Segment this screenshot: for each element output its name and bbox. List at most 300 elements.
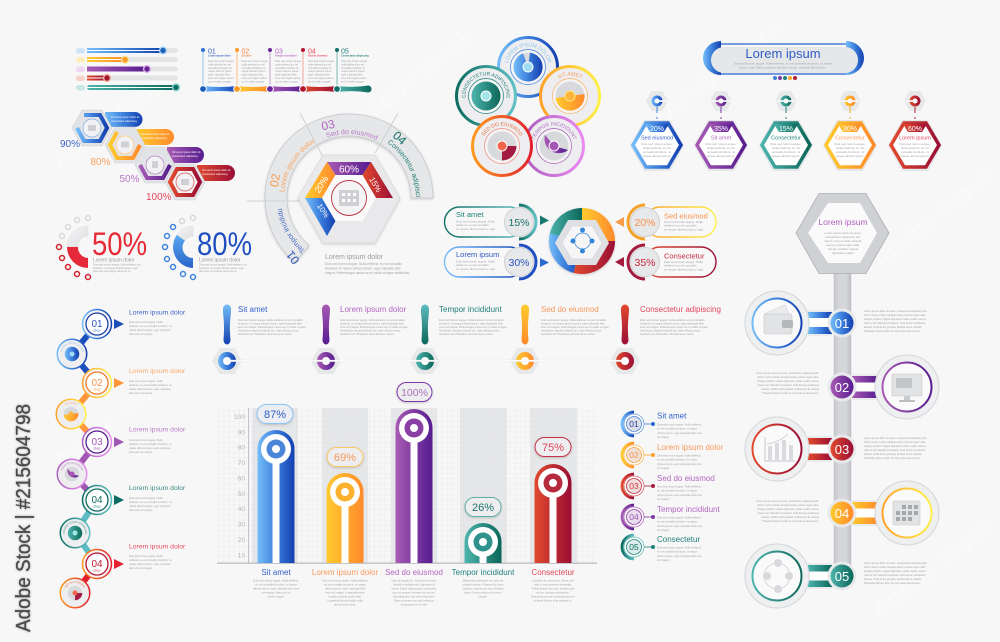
top hexagon bbox=[796, 194, 889, 274]
milestone sit amet: hendrerit vel. Phasellus vehicula lacus metus. bbox=[238, 332, 293, 336]
step 02: neque ultrices ipsum, eget vulputate bbox=[129, 387, 171, 391]
step 03: Lorem ipsum dolor bbox=[129, 426, 186, 434]
item consectetur: Duis sed rutrum augue. Nulla eleifend, bbox=[657, 546, 701, 550]
chart column notes: blandit. bbox=[479, 594, 488, 598]
item sed do eiusmod: Sed do eiusmod bbox=[657, 474, 715, 483]
chart column labels: Sit amet bbox=[261, 568, 291, 577]
panel: 50 percent gauge bbox=[56, 216, 147, 280]
step 01: eleifend, eu vel convallis tincidunt, mi bbox=[129, 324, 172, 328]
step 01: ac mi mollis congue bbox=[208, 79, 231, 83]
segment 15 percent bbox=[362, 162, 393, 198]
row 01: Lorem ipsum dolor sit amet, consectetur adipiscing elit. bbox=[864, 309, 927, 313]
item tempor incididunt: eu vel convallis tincidunt, mi neque bbox=[657, 520, 698, 524]
step 01: 01 bbox=[208, 48, 216, 56]
chart column notes: blandit in sodales sed, dignissim id bbox=[393, 582, 435, 586]
step 01 bbox=[82, 310, 186, 338]
pill: sit amet: Sit amet bbox=[456, 210, 484, 219]
milestone tempor incididunt: Tempor incididunt bbox=[439, 305, 502, 314]
segment labels bbox=[312, 164, 383, 220]
milestone consectetur adipiscing: Duis sed rutrum augue. Nulla eleifend, eu vel convallis bbox=[640, 318, 705, 322]
step 02: ac mi mollis congue bbox=[242, 79, 265, 83]
value pill 69% bbox=[327, 448, 363, 466]
hexagon text: Integer porttitor magna bbox=[828, 247, 859, 251]
panel: hexagon org row bbox=[630, 91, 942, 171]
caption bbox=[199, 258, 247, 273]
step 04: convallis tincidunt mi bbox=[308, 66, 332, 70]
hexagon dots bbox=[162, 216, 196, 280]
item sed do eiusmod: Duis sed rutrum augue. Nulla eleifend, bbox=[657, 484, 701, 488]
connector line bbox=[657, 100, 915, 102]
caption: tincidunt, mi neque ultrices ipsum, eget bbox=[199, 266, 244, 270]
row 04: risus et orci blandit consequat. Cras luctus vestibulum bbox=[757, 511, 819, 515]
bar 40 percent bbox=[76, 56, 178, 63]
row 04 bbox=[756, 481, 939, 545]
ring captions: Consectetur adipiscing bbox=[388, 140, 422, 197]
milestone consectetur adipiscing: tincidunt, mi neque ultrices ipsum, eget vulputate felis bbox=[640, 322, 704, 326]
chart column notes: faucibus, aliquet nisi sed, pharetra bbox=[463, 586, 504, 590]
hexagon text bbox=[824, 231, 862, 255]
step 01: neque ultrices ipsum bbox=[208, 69, 232, 73]
chart column notes: Duis sed rutrum augue. Nulla eleifend, bbox=[322, 578, 368, 582]
column 4: Consectetur bbox=[835, 136, 865, 142]
ring captions: Tempor incididunt bbox=[278, 208, 304, 254]
circle: lorem ipsum dolor: LOREM IPSUM DOLOR bbox=[504, 42, 552, 63]
chart column notes: Etiam at lectus non arcu interdum bbox=[394, 598, 435, 602]
column 1: Duis sed rutrum augue. bbox=[641, 142, 673, 146]
caption: Duis sed rutrum augue. Nulla eleifend, eu bbox=[199, 262, 247, 266]
panel: left step chain bbox=[56, 308, 186, 608]
segment 20 percent bbox=[305, 162, 336, 198]
chart column notes: dui eu, volutpat volutpat leo. bbox=[536, 590, 570, 594]
row 05: risus et orci blandit consequat. Cras luctus vestibulum bbox=[864, 573, 926, 577]
item sed do eiusmod: vel magna. bbox=[657, 497, 670, 501]
milestone sit amet: tincidunt, mi neque ultrices ipsum, eget vulputate felis bbox=[238, 322, 302, 326]
hexagon title: Lorem ipsum bbox=[818, 217, 868, 227]
tab captions bbox=[111, 115, 231, 176]
item lorem ipsum dolor bbox=[622, 443, 724, 470]
segment 60 percent bbox=[327, 162, 371, 175]
step 01: neque ultrices ipsum, eget vulputate bbox=[129, 328, 171, 332]
mini circle blue bbox=[56, 338, 88, 370]
step 02: 02 bbox=[242, 48, 249, 56]
milestone lorem ipsum dolor bbox=[311, 304, 409, 374]
item lorem ipsum dolor: Duis sed rutrum augue. Nulla eleifend, bbox=[657, 454, 701, 458]
step 03: nulla eleifend eu vel bbox=[275, 62, 298, 66]
pill: sit amet bbox=[444, 205, 549, 239]
row 01: Integer porttitor magna dignissim mattis mattis. Donec bbox=[864, 317, 927, 321]
column 5: convallis tincidunt, mi bbox=[901, 150, 929, 154]
item sed do eiusmod bbox=[622, 474, 715, 501]
row 02: Lorem ipsum dolor sit amet, consectetur adipiscing elit. bbox=[756, 371, 819, 375]
milestone consectetur adipiscing: Consectetur adipiscing bbox=[640, 305, 721, 314]
step 01: convallis tincidunt mi bbox=[208, 66, 232, 70]
item sit amet: eu vel convallis tincidunt, mi neque bbox=[657, 427, 698, 431]
step 03: eget vulputate felis bbox=[275, 73, 297, 77]
step 04: Lorem ipsum dolor bbox=[129, 485, 186, 492]
step 02: Lorem ipsum dolor bbox=[129, 368, 186, 375]
step 02: neque ultrices ipsum bbox=[242, 69, 265, 73]
step 05: Lorem ipsum dolor bbox=[129, 544, 186, 550]
column 1: Sed eiusmod bbox=[641, 136, 673, 142]
item sit amet bbox=[622, 412, 702, 439]
pill: sed eiusmod: 20% bbox=[634, 217, 656, 229]
row 01: Sed in enim ut felis volutpat auctor pretium eget nulla. bbox=[864, 313, 926, 317]
item lorem ipsum dolor: eu vel convallis tincidunt, mi neque bbox=[657, 458, 698, 462]
panel: progress bars bbox=[76, 47, 179, 91]
pill: sed eiusmod: eleifend, eu vel convallis bbox=[664, 224, 697, 228]
step 02: eros vel magna varius bbox=[242, 76, 268, 80]
step 02: eget vulputate felis bbox=[242, 73, 264, 77]
chart column notes: mollis congue. bbox=[267, 594, 285, 598]
circle: sit amet: SIT AMET bbox=[558, 72, 583, 78]
axis labels: 30 bbox=[238, 522, 245, 528]
item sit amet: Duis sed rutrum augue. Nulla eleifend, bbox=[657, 422, 701, 426]
description: Lorem ipsum dolor bbox=[325, 254, 384, 261]
step 05: 04 bbox=[91, 559, 103, 570]
column 2: 35% bbox=[714, 126, 728, 133]
item sit amet: Sit amet bbox=[657, 412, 687, 420]
step 02: convallis tincidunt mi bbox=[242, 66, 266, 70]
pill: consectetur: Duis sed rutrum augue. Nulla bbox=[664, 260, 703, 264]
segment labels: 60% bbox=[339, 164, 359, 176]
ring captions bbox=[278, 129, 422, 254]
step 03: 03 bbox=[275, 48, 283, 56]
chart column notes: arcu at semper. Aenean nec leo leo. bbox=[393, 590, 436, 594]
caption: Lorem ipsum dolor bbox=[93, 258, 135, 264]
row 03: Sed in enim ut felis volutpat auctor pretium eget nulla. bbox=[864, 440, 926, 444]
milestone tempor incididunt: tincidunt, mi neque ultrices ipsum, eget vulputate felis bbox=[439, 322, 503, 326]
tab captions: 04 Lorem ipsum dolor sit bbox=[202, 168, 231, 172]
step 03 bbox=[82, 426, 186, 456]
ring numbers: 04 bbox=[390, 128, 410, 148]
item consectetur: 05 bbox=[629, 542, 639, 552]
watermark: Adobe Stock bbox=[467, 393, 600, 505]
step 01: Duis sed rutrum augue bbox=[208, 59, 235, 63]
chart column notes: Sed bibendum nisi velit et faucibus. bbox=[393, 594, 435, 598]
pill: sit amet: eleifend, eu vel convallis bbox=[456, 223, 489, 227]
step 05: step bbox=[93, 568, 102, 572]
ring numbers: 01 bbox=[283, 248, 302, 267]
step 03 bbox=[267, 48, 302, 92]
subtitle: Duis sed rutrum augue. Nulla eleifend, eu vel convallis tincidunt, mi neque bbox=[734, 62, 832, 66]
column 1: Nulla eleifend, eu vel bbox=[643, 146, 671, 150]
hexagon text: Lorem ipsum dolor sit amet, bbox=[824, 231, 862, 235]
segment labels: 15% bbox=[367, 176, 383, 194]
percentage labels bbox=[60, 139, 172, 203]
row 02: Phasellus dictum dolor id urna varius elementum. bbox=[762, 391, 819, 395]
tab captions: consectetur adipiscing bbox=[111, 119, 137, 123]
item sit amet: vel magna. bbox=[657, 435, 670, 439]
tab captions: consectetur adipiscing bbox=[202, 172, 228, 176]
step 02: felis eros vel magna. bbox=[129, 391, 153, 395]
row 03: Phasellus dictum dolor id urna varius elementum. bbox=[864, 456, 921, 460]
item sit amet: ultrices ipsum, eget vulputate felis eros bbox=[657, 431, 702, 435]
icon: people cycle bbox=[570, 228, 594, 254]
watermark: Adobe Stock bbox=[657, 13, 790, 125]
item tempor incididunt: 04 bbox=[629, 512, 639, 522]
step 01: step bbox=[93, 328, 102, 332]
column 3: neque ultrices ipsum. bbox=[772, 154, 800, 158]
item lorem ipsum dolor: ultrices ipsum, eget vulputate felis eros bbox=[657, 462, 702, 466]
row 04: Phasellus dictum dolor id urna varius elementum. bbox=[762, 519, 819, 523]
ring numbers: 02 bbox=[267, 172, 283, 188]
gauge ring bbox=[67, 226, 88, 268]
pill: sit amet: mi neque ultrices ipsum, eget bbox=[456, 227, 495, 231]
row 03: Lorem ipsum dolor sit amet, consectetur adipiscing elit. bbox=[864, 436, 927, 440]
column 1: neque ultrices ipsum. bbox=[643, 154, 671, 158]
step 04: eleifend, eu vel convallis tincidunt, mi bbox=[129, 500, 172, 504]
step 03: 03 bbox=[91, 437, 103, 448]
column 2: neque ultrices ipsum. bbox=[707, 154, 735, 158]
item sed do eiusmod: eu vel convallis tincidunt, mi neque bbox=[657, 489, 698, 493]
chart column notes: consequat non et odio. bbox=[400, 602, 428, 606]
row 01: 01 bbox=[835, 316, 849, 331]
item sed do eiusmod: ultrices ipsum, eget vulputate felis eros bbox=[657, 493, 702, 497]
axes bbox=[217, 408, 597, 564]
mini circle red bbox=[60, 578, 90, 608]
column 4: Duis sed rutrum augue. bbox=[834, 142, 866, 146]
milestone tempor incididunt: hendrerit vel. Phasellus vehicula lacus metus. bbox=[439, 332, 494, 336]
item lorem ipsum dolor: 02 bbox=[629, 450, 639, 460]
value pill 87% bbox=[257, 404, 293, 424]
chart column notes: ultrices ipsum, eget vulputate felis bbox=[325, 586, 366, 590]
bar 90 percent bbox=[76, 47, 178, 54]
bar sit amet 87% bbox=[258, 430, 294, 563]
pill: consectetur: mi neque ultrices ipsum, eget bbox=[664, 267, 703, 271]
step 04: 04 bbox=[308, 48, 316, 56]
percentage labels: 50% bbox=[120, 174, 140, 185]
value pill 75%: 75% bbox=[542, 442, 564, 454]
column 1 bbox=[630, 91, 684, 171]
chart column notes: elit vel porta tortor. bbox=[334, 602, 356, 606]
step 02: Duis sed rutrum augue bbox=[242, 59, 268, 63]
row 02: risus et orci blandit consequat. Cras luctus vestibulum bbox=[757, 383, 819, 387]
milestone tempor incididunt: eros vel magna. Pellentesque varius ac mi mollis congue. bbox=[439, 325, 508, 329]
step 01: Lorem ipsum dolor bbox=[208, 54, 231, 58]
row 02: laoreet. Nulla id dui gravida, facilisis dui at, blandit bbox=[762, 387, 819, 391]
description: magna. Pellentesque varius ac mi mollis congue vestibulum. bbox=[325, 271, 410, 275]
pill: lorem ipsum bbox=[444, 245, 549, 279]
chart column notes: fringilla, gravida turpis vitae, bbox=[328, 594, 362, 598]
column 3: Nulla eleifend, eu vel bbox=[772, 146, 800, 150]
timeline ribbon bbox=[203, 86, 372, 92]
subtitle: ipsum, eget. Etiam posuere pharetra neque, volutpat ullamcorper. bbox=[739, 66, 827, 70]
chart column labels: Consectetur bbox=[531, 568, 575, 577]
panel: 80 percent gauge bbox=[162, 216, 252, 280]
axis labels: 10 bbox=[238, 552, 245, 560]
step 05: neque ultrices ipsum, eget vulputate bbox=[129, 562, 171, 566]
pill: lorem ipsum: eleifend, eu vel convallis bbox=[456, 263, 489, 267]
pill: lorem ipsum: 30% bbox=[508, 257, 530, 269]
milestone lorem ipsum dolor: tincidunt, mi neque ultrices ipsum, eget vulputate felis bbox=[340, 322, 404, 326]
chart column notes: vel magna. Varius ac mi bbox=[262, 590, 291, 594]
bar consectetur 75% bbox=[534, 464, 572, 563]
mini circle yellow bbox=[56, 398, 86, 430]
column 5: Duis sed rutrum augue. bbox=[899, 142, 931, 146]
milestone sed do eiusmod: hendrerit vel. Phasellus vehicula lacus metus. bbox=[541, 332, 596, 336]
watermark: Adobe Stock bbox=[47, 63, 180, 175]
circle: sed do eiusmod bbox=[471, 115, 533, 177]
segment labels: 10% bbox=[315, 202, 331, 220]
step 03: eros vel magna varius bbox=[275, 76, 301, 80]
tab 01 bbox=[105, 112, 142, 127]
tab 03 bbox=[167, 147, 204, 163]
column 5: 60% bbox=[908, 126, 922, 133]
column 2: Sit amet bbox=[711, 136, 732, 142]
description: Duis sed rutrum augue. Nulla eleifend, eu vel convallis bbox=[325, 262, 402, 266]
row 01: Phasellus dictum dolor id urna varius elementum. bbox=[864, 329, 921, 333]
tab captions: 02 Lorem ipsum dolor sit bbox=[141, 132, 170, 136]
hexagon centre bbox=[808, 203, 877, 263]
item tempor incididunt: vel magna. bbox=[657, 528, 670, 532]
value: 50% bbox=[92, 226, 147, 262]
bar lorem ipsum dolor 69% bbox=[326, 473, 364, 563]
milestone sit amet: Duis sed rutrum augue. Nulla eleifend, eu vel convallis bbox=[238, 318, 303, 322]
panel: hexagon staircase with percentages bbox=[60, 110, 235, 203]
chart column notes: eu vel convallis tincidunt, mi neque bbox=[255, 582, 297, 586]
row 02: Sed in enim ut felis volutpat auctor pretium eget nulla. bbox=[757, 375, 819, 379]
hexagon text: dignissim mattis. bbox=[832, 251, 854, 255]
row 03: 03 bbox=[835, 442, 849, 457]
row 03: Integer porttitor magna dignissim mattis mattis. Donec bbox=[864, 444, 927, 448]
step 01: Duis sed rutrum augue. Nulla bbox=[129, 320, 163, 324]
panel: drop milestones bbox=[212, 304, 721, 374]
pill: sed eiusmod: Sed eiusmod bbox=[664, 212, 708, 220]
row 03: risus et orci blandit consequat. Cras luctus vestibulum bbox=[864, 448, 926, 452]
pill: sit amet: Duis sed rutrum augue. Nulla bbox=[456, 220, 495, 224]
step 04: nulla eleifend eu vel bbox=[308, 62, 331, 66]
bar 25 percent bbox=[76, 75, 178, 81]
milestone consectetur adipiscing: Vestibulum placerat blandit dui, vitae efficitur purus bbox=[640, 328, 701, 332]
step 04: Sed do eiusmod bbox=[308, 54, 328, 58]
milestone sed do eiusmod: Duis sed rutrum augue. Nulla eleifend, eu vel convallis bbox=[541, 318, 606, 322]
step 05: Consectetur adipiscing bbox=[341, 54, 369, 58]
chart column notes: in gravida lectus fringilla nulla bbox=[327, 598, 363, 602]
column 4 bbox=[823, 91, 877, 171]
row 04: 04 bbox=[835, 506, 849, 521]
pill: consectetur: Consectetur bbox=[664, 252, 705, 260]
bar sed do eiusmod 100% bbox=[396, 409, 432, 563]
item sit amet: 01 bbox=[629, 419, 639, 429]
ring captions: Sed do eiusmod bbox=[326, 129, 378, 140]
milestone lorem ipsum dolor: Duis sed rutrum augue. Nulla eleifend, eu vel convallis bbox=[340, 318, 405, 322]
chart column notes: Duis sed rutrum augue. Nulla eleifend, bbox=[253, 578, 299, 582]
caption: felis eros vel magna varius ac mi bbox=[199, 269, 237, 273]
step 05: neque ultrices ipsum bbox=[341, 69, 365, 73]
step 04: felis eros vel magna. bbox=[129, 508, 153, 512]
chart column notes: Curabitur id cursus nisi. Donec sed bbox=[532, 578, 574, 582]
hexagon 1 bbox=[72, 110, 112, 146]
milestone sit amet: Sit amet bbox=[238, 305, 268, 314]
hexagon text: consectetur adipiscing elit. bbox=[825, 235, 861, 239]
hexagon text: auctor pretium eget nulla. bbox=[826, 243, 860, 247]
axis labels: 60 bbox=[238, 476, 245, 482]
step 04: ac mi mollis congue bbox=[308, 79, 331, 83]
item consectetur bbox=[622, 535, 702, 562]
step 02: Duis sed rutrum augue. Nulla bbox=[129, 379, 163, 383]
column 3 bbox=[759, 91, 813, 171]
panel: percent pills around wheel bbox=[444, 205, 716, 279]
value pill 100% bbox=[397, 382, 432, 402]
column 5: neque ultrices ipsum. bbox=[901, 154, 929, 158]
column 3: convallis tincidunt, mi bbox=[772, 150, 800, 154]
row 02: 02 bbox=[835, 380, 849, 395]
stem bbox=[834, 270, 851, 565]
step 01: Lorem ipsum dolor bbox=[129, 310, 186, 316]
circle: tempor incididunt bbox=[528, 115, 585, 177]
step 01: felis eros vel magna. bbox=[129, 332, 153, 336]
chart column labels: Tempor incididunt bbox=[452, 568, 515, 577]
row 02 bbox=[756, 355, 939, 419]
center icon bbox=[332, 180, 366, 216]
row 05: Integer porttitor magna dignissim mattis mattis. Donec bbox=[864, 569, 927, 573]
pill frame bbox=[703, 41, 864, 75]
ring numbers: 03 bbox=[320, 117, 336, 133]
value pill 69%: 69% bbox=[334, 452, 356, 464]
step 01: 01 bbox=[91, 319, 103, 330]
value pill 26%: 26% bbox=[472, 502, 494, 514]
row 01 bbox=[745, 291, 927, 355]
column 1: convallis tincidunt, mi bbox=[643, 150, 671, 154]
milestone sit amet: Vestibulum placerat blandit dui, vitae efficitur purus bbox=[238, 328, 299, 332]
step 05: 05 bbox=[341, 48, 349, 56]
pill: sit amet: 15% bbox=[508, 217, 530, 229]
chart column notes: Nam ut feugiat leo. Vivamus leo risus, bbox=[391, 578, 437, 582]
pill: consectetur: 35% bbox=[634, 257, 656, 269]
step 05: Duis sed rutrum augue. Nulla bbox=[129, 554, 163, 558]
axis labels: 90 bbox=[238, 430, 245, 436]
step 03: eleifend, eu vel convallis tincidunt, mi bbox=[129, 442, 172, 446]
tab captions: consectetur adipiscing bbox=[172, 154, 198, 158]
row 05: Phasellus dictum dolor id urna varius elementum. bbox=[864, 581, 921, 585]
bar 100 percent bbox=[76, 84, 179, 91]
step 05: Duis sed rutrum augue bbox=[341, 59, 368, 63]
step 02 bbox=[234, 48, 268, 92]
step 02: Sit amet bbox=[242, 54, 251, 58]
milestone sed do eiusmod: tincidunt, mi neque ultrices ipsum, eget vulputate felis bbox=[541, 322, 605, 326]
hexagon dots bbox=[56, 216, 90, 280]
column 3: Consectetur bbox=[771, 136, 801, 142]
step 02: nulla eleifend eu vel bbox=[242, 62, 265, 66]
step 03: felis eros vel magna. bbox=[129, 450, 153, 454]
milestone tempor incididunt bbox=[410, 304, 508, 374]
row 05: laoreet. Nulla id dui gravida, facilisis dui at, blandit bbox=[864, 577, 922, 581]
column 5 bbox=[888, 91, 942, 171]
item tempor incididunt: Duis sed rutrum augue. Nulla eleifend, bbox=[657, 516, 701, 520]
circle: consectetur adipiscing bbox=[455, 65, 517, 126]
chart column notes: sit amet dictum urna posuere in. bbox=[534, 598, 572, 602]
column 4: convallis tincidunt, mi bbox=[836, 150, 864, 154]
ring dividers bbox=[247, 113, 398, 201]
column 2 bbox=[694, 91, 748, 171]
row 05: Lorem ipsum dolor sit amet, consectetur adipiscing elit. bbox=[864, 561, 927, 565]
milestone consectetur adipiscing: hendrerit vel. Phasellus vehicula lacus metus. bbox=[640, 332, 695, 336]
axis labels: 40 bbox=[238, 506, 245, 513]
chart shaded columns bbox=[252, 408, 577, 563]
value pill 100%: 100% bbox=[401, 387, 428, 399]
milestone sed do eiusmod bbox=[510, 304, 610, 374]
step 04 bbox=[82, 485, 186, 514]
step 02: eleifend, eu vel convallis tincidunt, mi bbox=[129, 383, 172, 387]
item consectetur: Consectetur bbox=[657, 535, 700, 544]
description bbox=[325, 254, 410, 275]
step 03: convallis tincidunt mi bbox=[275, 66, 299, 70]
row 05: 05 bbox=[835, 569, 849, 584]
step 01 bbox=[200, 48, 235, 92]
row 02: Integer porttitor magna dignissim mattis mattis. Donec bbox=[757, 379, 820, 383]
row 05: Sed in enim ut felis volutpat auctor pretium eget nulla. bbox=[864, 565, 926, 569]
chart column notes: Maecenas sollicitudin orci sed nisi bbox=[463, 578, 504, 582]
